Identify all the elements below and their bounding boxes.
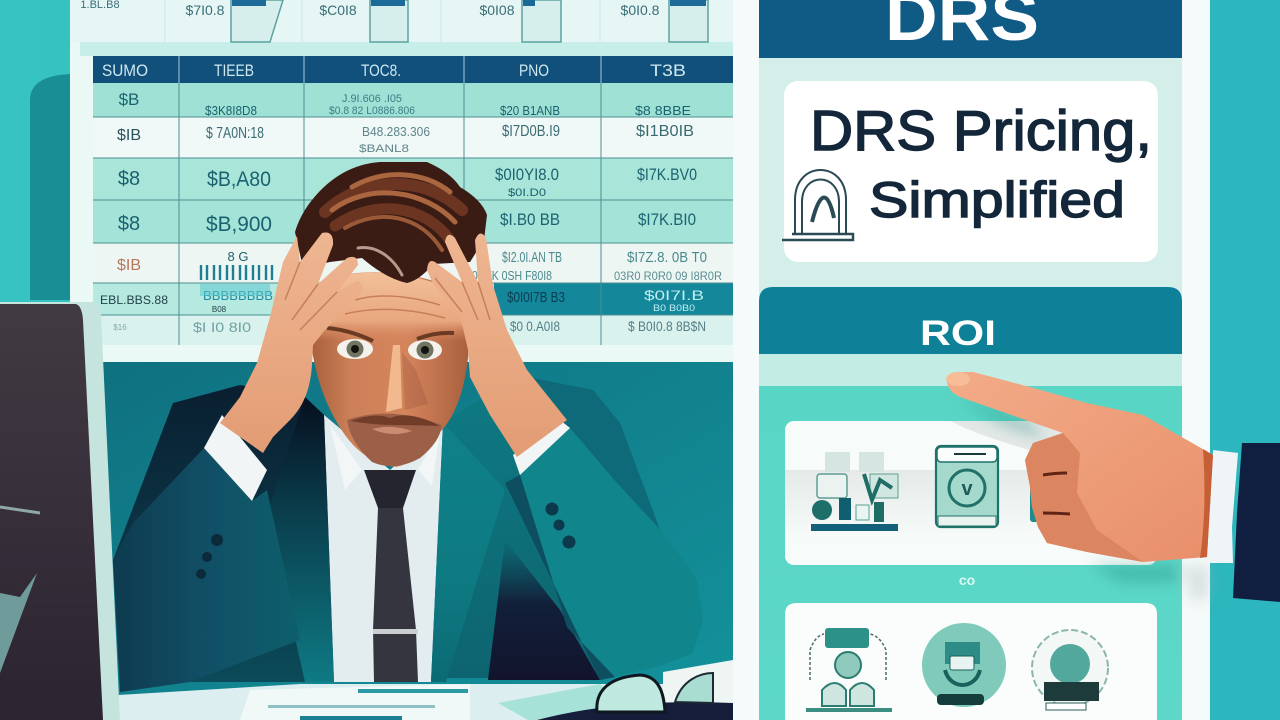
- top table strip with product icons: $0I0.8: [621, 2, 660, 18]
- left sleeve: [113, 448, 300, 692]
- table cell values: $B,A80: [207, 168, 271, 191]
- lapels: [267, 397, 505, 682]
- card: tools row 1: [785, 421, 1157, 565]
- table header: TIEEB: [214, 61, 254, 80]
- table cell values: B48.283.306: [362, 124, 430, 139]
- table header: TOC8.: [361, 61, 401, 80]
- table cell values: $B: [119, 90, 139, 109]
- eyes: [327, 328, 454, 360]
- glasses on desk: [537, 660, 733, 720]
- table cell values: $20 B1ANB: [500, 103, 560, 118]
- hair: [295, 162, 487, 283]
- card: tools row 2: [785, 603, 1157, 720]
- panel: DRS pricing column: [733, 0, 1210, 720]
- icon: app window with V: [936, 446, 998, 527]
- DRS header bar: [759, 0, 1182, 58]
- table header: PNO: [519, 61, 549, 80]
- icon: machinery cluster: [811, 452, 898, 531]
- face: [312, 272, 468, 467]
- icon: app window with V: v: [961, 478, 973, 500]
- icon: archway book: [806, 628, 892, 712]
- table cell values: $0I0I7B B3: [507, 289, 565, 306]
- pointing hand with sleeve: [946, 372, 1280, 602]
- table header: T3B: [650, 61, 686, 80]
- top table strip with product icons: $0I08: [479, 2, 515, 18]
- table cell values: $I7Z.8. 0B T0: [627, 249, 707, 266]
- mini bar cluster: [201, 265, 272, 280]
- right shoulder: [505, 378, 660, 560]
- icon: outline emblem: [782, 170, 853, 240]
- jacket sleeve: [1233, 443, 1280, 602]
- pricing table rows: [93, 83, 733, 345]
- top table strip with product icons: $C0I8: [319, 2, 357, 18]
- table cell values: EBL.BBS.88: [100, 293, 168, 307]
- person: stressed man holding head: [113, 162, 703, 692]
- table cell values: $BANL8: [359, 143, 409, 155]
- panel: pricing chart poster: [70, 0, 733, 362]
- table cell values: J.9I.606 .I05: [342, 93, 402, 105]
- table cell values: $ 7A0N:18: [206, 125, 264, 142]
- table cell values: [100, 90, 722, 335]
- heading: ROI: ROI: [920, 314, 996, 353]
- table cell values: $0I0YI8.0: [495, 165, 559, 184]
- table cell values: $8: [118, 213, 140, 235]
- table header: [93, 56, 733, 83]
- desk with papers: [118, 684, 733, 720]
- table cell values: $I.B0 BB: [500, 210, 560, 229]
- title card: [782, 81, 1158, 262]
- table cell values: $I I0 8I0: [193, 319, 251, 335]
- sleeve buttons: [546, 502, 576, 548]
- table cell values: $I7K.BV0: [637, 165, 697, 184]
- table cell values: B08: [212, 305, 227, 314]
- ROI body panel: [759, 386, 1182, 720]
- office wall behind person: [103, 362, 733, 720]
- top table strip with product icons: [70, 0, 733, 42]
- table cell values: B0 B0B0: [653, 303, 695, 313]
- top table strip with product icons: $7I0.8: [186, 2, 225, 18]
- shirt: [324, 415, 443, 682]
- left hand: [220, 232, 362, 453]
- table cell values: $I1B0IB: [636, 123, 694, 140]
- table cell values: $IB: [117, 127, 141, 144]
- table cell values: $I2.0I.AN TB: [502, 249, 562, 266]
- small link glyph: co: [959, 572, 975, 588]
- table cell values: $IB: [117, 257, 141, 274]
- ROI section bar: [759, 287, 1182, 388]
- table cell values: $0I7I.B: [644, 287, 704, 303]
- table cell values: $0 0.A0I8: [510, 318, 560, 334]
- table cell values: $0I.D0: [508, 187, 546, 199]
- tie: [364, 470, 418, 682]
- title text: DRS Pricing,: [810, 99, 1152, 163]
- table cell values: BBBBBBBB: [203, 288, 273, 303]
- cuffs: [204, 415, 570, 501]
- table cell values: 8 G: [228, 249, 248, 264]
- table cell values: $8 8BBE: [635, 103, 691, 118]
- right sleeve: [505, 428, 703, 680]
- table header: SUMO: [102, 61, 148, 80]
- shirt collar shading: [330, 425, 440, 490]
- table cell values: $0.8 82 L0886.806: [329, 105, 415, 117]
- shirt cuff: [1207, 450, 1238, 563]
- table cell values: 03R0 R0R0 09 I8R0R: [614, 269, 722, 283]
- icon: globe keyboard: [1032, 630, 1108, 710]
- icon: round badge: [922, 623, 1006, 707]
- table cell values: $ B0I0.8 8B$N: [628, 318, 706, 334]
- sleeve buttons: [196, 534, 223, 579]
- table cell values: $8: [118, 168, 140, 190]
- table cell values: $I7D0B.I9: [502, 123, 560, 140]
- jacket torso: [113, 378, 660, 682]
- hand cast shadow: [955, 395, 1209, 600]
- table cell values: $I7K.BI0: [638, 210, 696, 229]
- table cell values: $B,900: [206, 213, 272, 236]
- title text: Simplified: [869, 172, 1125, 228]
- monitor at left: [0, 302, 120, 720]
- title text: [810, 99, 1152, 228]
- right hand: [427, 233, 567, 457]
- beard: [347, 414, 442, 466]
- table cell values: $0RFK 0SH F80I8: [466, 268, 552, 283]
- hand shape: [946, 372, 1213, 562]
- table cell values: $3K8I8D8: [205, 103, 257, 118]
- table cell values: $16: [113, 323, 127, 332]
